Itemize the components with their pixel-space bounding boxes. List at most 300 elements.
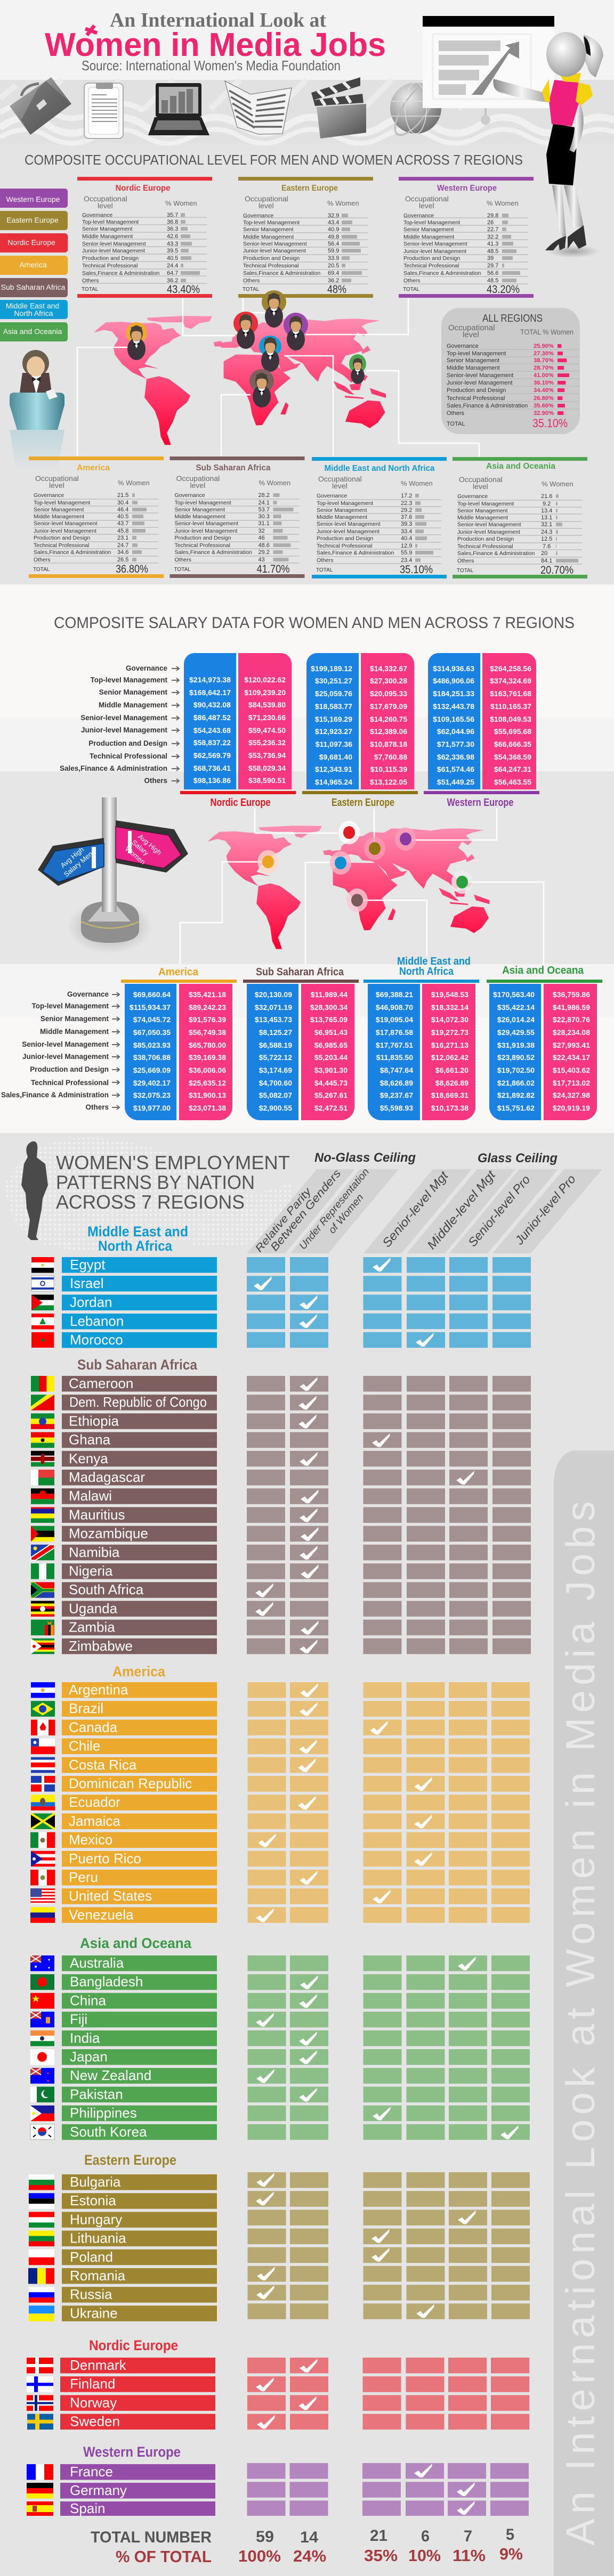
row: Jamaica: Jamaica xyxy=(69,1813,120,1829)
panel: All Regions: Others xyxy=(447,410,465,417)
panel: All Regions: Production and Design xyxy=(447,387,506,394)
totals: total number: 7 xyxy=(464,2528,472,2545)
salary columns: Western Europe: $132,443.78 xyxy=(433,702,474,711)
salary row labels: lower: Production and Design xyxy=(30,1065,109,1073)
salary columns: Eastern Europe: $13,122.05 xyxy=(370,778,407,786)
legend: region tabs: Asia and Oceania xyxy=(3,327,62,336)
panel: Sub Saharan Africa occupational table: 48.6 xyxy=(258,542,270,549)
panel: Asia and Oceania occupational table: 13.4 xyxy=(541,508,552,514)
rows: America xyxy=(30,1682,432,1923)
subtitle: source: Source: International Women's Media Foundation xyxy=(82,58,341,74)
legend: region tabs: North Africa xyxy=(14,309,53,317)
rows: Middle East and North Africa xyxy=(31,1257,434,1348)
row: Chile: Chile xyxy=(69,1738,100,1754)
salary columns: Sub Saharan Africa: $5,082.07 xyxy=(259,1091,292,1099)
salary row labels: lower: Senior Management xyxy=(41,1015,109,1023)
panel: Eastern Europe occupational table: Junior-level Management xyxy=(243,248,306,254)
salary columns: Nordic Europe: $168,642.17 xyxy=(189,688,231,697)
salary row labels: upper: Top-level Management xyxy=(90,676,167,684)
salary row labels: upper: Others xyxy=(144,777,167,785)
column headers: Senior-level Mgt xyxy=(379,1168,451,1250)
panel: Sub Saharan Africa occupational table: 41.70% xyxy=(257,563,290,575)
receptionist figure at podium xyxy=(10,350,64,471)
salary row labels: lower xyxy=(1,990,119,1111)
icon: globe xyxy=(388,75,443,141)
row: Jordan: Jordan xyxy=(70,1294,112,1310)
panel: Nordic Europe occupational table: Senior Management xyxy=(82,226,133,232)
panel: Nordic Europe occupational table: Governance xyxy=(82,212,112,218)
row: New Zealand: New Zealand xyxy=(70,2067,151,2083)
row: Japan: Japan xyxy=(70,2049,108,2065)
salary columns: Sub Saharan Africa: $11,989.44 xyxy=(311,990,348,999)
panel: America occupational table: Top-level Management xyxy=(34,500,90,506)
panel: Western Europe occupational table: 48.5 xyxy=(487,248,498,255)
salary columns: Sub Saharan Africa: $6,985.65 xyxy=(314,1041,348,1049)
salary columns: Asia and Oceana: $21,866.02 xyxy=(497,1079,535,1087)
salary columns: Middle East and North Africa: $14,072.30 xyxy=(431,1015,468,1024)
illustration: salary signpost: Avg High xyxy=(59,845,85,869)
panel: Middle East and North Africa occupational table: Sales,Finance & Administration xyxy=(317,550,394,556)
region heading: Middle East and North Africa xyxy=(87,1224,188,1254)
panel: Asia and Oceania occupational table: Governance xyxy=(457,493,488,500)
cell grid: America xyxy=(266,1682,511,1923)
row: Chile xyxy=(31,1738,317,1754)
salary row labels: upper: Senior Management xyxy=(99,688,167,696)
row: Mauritius xyxy=(31,1506,318,1523)
row: Australia: Australia xyxy=(70,1955,124,1971)
salary columns: Eastern Europe: $17,679.09 xyxy=(370,702,407,711)
panel: America occupational table: 34.6 xyxy=(117,549,128,556)
row: Morocco xyxy=(31,1332,434,1348)
panel: Middle East and North Africa occupational table: 17.2 xyxy=(401,493,412,499)
row: Namibia: Namibia xyxy=(69,1544,120,1560)
panel: Asia and Oceania occupational table: Others xyxy=(457,558,474,564)
column headers: Relative Parity xyxy=(253,1185,314,1254)
salary columns: Middle East and North Africa: $5,598.93 xyxy=(380,1104,413,1112)
salary columns: Western Europe: $264,258.56 xyxy=(490,664,531,673)
row: Bulgaria xyxy=(29,2173,274,2190)
panel: Western Europe occupational table: Production and Design xyxy=(403,255,460,262)
salary columns: Asia and Oceana xyxy=(487,980,602,1120)
panel: Nordic Europe occupational table: Occupational xyxy=(84,194,127,203)
salary columns: Nordic Europe: $53,736.94 xyxy=(248,751,286,760)
row: Peru: Peru xyxy=(69,1869,98,1885)
panel: Nordic Europe occupational table: Middle Management xyxy=(82,233,133,240)
panel: Asia and Oceania occupational table: 12.5 xyxy=(541,536,552,542)
panel: Nordic Europe occupational table: Technical Professional xyxy=(82,263,138,269)
panel: America occupational table: Sales,Finance & Administration xyxy=(34,549,111,556)
side panel: rotated title xyxy=(554,1450,614,2576)
salary columns: Nordic Europe: $84,539.80 xyxy=(248,700,286,709)
illustration: salary signpost: Salary Men xyxy=(62,850,94,878)
panel: Sub Saharan Africa occupational table: Senior Management xyxy=(175,507,225,513)
salary columns: Eastern Europe: $27,300.28 xyxy=(370,676,407,685)
title: Women in Media Jobs: Women in Media Jobs xyxy=(45,27,386,63)
salary columns: Middle East and North Africa: $69,388.21 xyxy=(376,990,413,999)
row: Costa Rica xyxy=(31,1757,316,1773)
panel: Western Europe occupational table: 29.8 xyxy=(487,213,498,219)
row: Mauritius: Mauritius xyxy=(69,1506,125,1522)
row: Sweden: Sweden xyxy=(70,2414,120,2430)
salary columns: Eastern Europe: $14,260.75 xyxy=(370,715,407,723)
row: South Africa: South Africa xyxy=(69,1582,144,1597)
panel: All Regions: 28.70% xyxy=(534,365,554,371)
salary columns: Nordic Europe: $214,973.38 xyxy=(189,675,231,684)
row: Ethiopia: Ethiopia xyxy=(69,1413,119,1429)
panel: America occupational table: Senior Management xyxy=(34,507,84,513)
heading: lower region names: Sub Saharan Africa xyxy=(256,966,344,978)
panel: Asia and Oceania occupational table: Middle Management xyxy=(457,515,508,521)
salary row labels: lower: Others xyxy=(85,1103,109,1111)
panel: Sub Saharan Africa occupational table: 28.2 xyxy=(258,492,270,499)
salary row labels: lower: Technical Professional xyxy=(31,1079,109,1087)
salary row labels: upper: Technical Professional xyxy=(90,752,167,760)
salary columns: Asia and Oceana: $36,759.86 xyxy=(553,990,590,999)
row: Sweden xyxy=(27,2414,275,2430)
salary columns: Western Europe: $66,666.35 xyxy=(494,740,531,748)
row: Russia: Russia xyxy=(70,2286,112,2302)
row: Cameroon xyxy=(31,1375,318,1391)
panel: Eastern Europe occupational table: 36.2 xyxy=(328,278,339,284)
panel: America occupational table: 21.5 xyxy=(117,492,128,499)
salary columns: Eastern Europe: Eastern Europe xyxy=(332,797,394,809)
row: Kenya: Kenya xyxy=(69,1450,108,1466)
row: Argentina xyxy=(31,1682,318,1698)
salary columns: Western Europe: $62,336.98 xyxy=(437,753,474,761)
column headers xyxy=(247,1167,602,1254)
panel: America occupational table: 36.80% xyxy=(116,563,148,575)
panel: Sub Saharan Africa occupational table: 32 xyxy=(258,528,265,534)
panel: Asia and Oceania occupational table: Technical Professional xyxy=(457,543,513,550)
salary columns: America: $29,402.17 xyxy=(133,1079,171,1087)
panel: Nordic Europe occupational table: Nordic Europe xyxy=(115,184,171,193)
panel: Asia and Oceania occupational table: Occupational xyxy=(459,475,503,484)
panel: Asia and Oceania occupational table: Senior Management xyxy=(457,508,508,514)
region heading: Sub Saharan Africa: Sub Saharan Africa xyxy=(77,1357,198,1373)
panel: Sub Saharan Africa occupational table: 24.1 xyxy=(258,500,270,506)
row: Romania xyxy=(28,2267,275,2284)
heading: women's employment patterns xyxy=(56,1152,290,1213)
salary columns: Western Europe: $55,695.68 xyxy=(494,727,531,736)
heading: women's employment patterns: PATTERNS BY NATION xyxy=(56,1171,255,1193)
row: Madagascar: Madagascar xyxy=(69,1469,145,1485)
row: Malawi: Malawi xyxy=(69,1488,112,1504)
panel: Sub Saharan Africa occupational table: level xyxy=(190,481,205,490)
panel: All Regions: 32.90% xyxy=(534,410,554,417)
row: Ethiopia xyxy=(31,1413,317,1429)
salary columns: Eastern Europe: $14,332.67 xyxy=(370,664,407,673)
row: South Africa xyxy=(31,1582,273,1598)
salary row labels: lower: Junior-level Management xyxy=(22,1053,109,1061)
panel: America occupational table: Production and Design xyxy=(34,535,90,541)
salary row labels: lower: Top-level Management xyxy=(31,1002,109,1010)
map pin: Middle East and North Africa xyxy=(259,336,281,372)
panel: Sub Saharan Africa occupational table: 30.3 xyxy=(258,513,270,520)
panel: Nordic Europe occupational table: 39.5 xyxy=(167,248,178,254)
salary columns: Western Europe xyxy=(424,653,539,809)
panel: Sub Saharan Africa occupational table: Junior-level Management xyxy=(175,528,237,534)
heading: lower region names: America xyxy=(158,966,199,978)
panel: Nordic Europe occupational table: Senior-level Management xyxy=(82,241,146,247)
panel: America occupational table: 46.4 xyxy=(117,507,128,513)
row: South Korea: South Korea xyxy=(70,2124,147,2140)
row: Fiji xyxy=(30,2011,274,2027)
row: Lebanon xyxy=(31,1313,317,1330)
panel: Eastern Europe occupational table: 69.4 xyxy=(328,270,339,276)
row: France xyxy=(27,2464,432,2480)
panel: Middle East and North Africa occupational table: % Women xyxy=(401,479,433,487)
panel: Nordic Europe occupational table: level xyxy=(98,201,113,210)
salary columns: Eastern Europe: $12,389.06 xyxy=(370,727,407,736)
panel: Eastern Europe occupational table: Others xyxy=(243,278,260,284)
salary columns: America: $23,071.38 xyxy=(189,1104,226,1112)
map marker: America xyxy=(257,850,279,874)
totals: total number: 6 xyxy=(421,2528,430,2545)
row: Dominican Republic: Dominican Republic xyxy=(69,1775,192,1791)
panel: Sub Saharan Africa occupational table: 31.1 xyxy=(258,520,270,527)
panel: Middle East and North Africa occupational table: 29.2 xyxy=(401,507,412,513)
panel: Eastern Europe occupational table: Senior Management xyxy=(243,226,294,233)
panel: Eastern Europe occupational table: 43.4 xyxy=(328,219,339,226)
panel: Eastern Europe occupational table: 40.9 xyxy=(328,226,339,233)
region heading: Middle East and North Africa: North Africa xyxy=(98,1238,173,1254)
panel: Middle East and North Africa occupational table: 39.3 xyxy=(401,521,412,527)
row: Lithuania xyxy=(29,2229,390,2246)
salary columns: Nordic Europe: $120,022.62 xyxy=(244,675,286,684)
row: Zimbabwe xyxy=(31,1638,318,1654)
panel: Eastern Europe occupational table: level xyxy=(258,201,274,210)
rows: Sub Saharan Africa xyxy=(31,1375,474,1654)
panel: Middle East and North Africa occupational table: 23.4 xyxy=(401,557,412,564)
salary columns: Nordic Europe: $109,239.20 xyxy=(244,688,286,697)
row: Lithuania: Lithuania xyxy=(70,2230,126,2246)
salary columns: Sub Saharan Africa: $13,765.09 xyxy=(310,1015,348,1024)
salary columns: Middle East and North Africa: $12,062.42 xyxy=(431,1053,468,1062)
panel: Eastern Europe occupational table: Top-level Management xyxy=(243,219,300,226)
side panel: rotated title: An International Look at Women in Media Jobs xyxy=(558,1501,603,2546)
panel: Nordic Europe occupational table: TOTAL xyxy=(82,287,99,292)
panel: Middle East and North Africa occupational table: Senior-level Management xyxy=(317,521,381,527)
panel: All Regions: 27.30% xyxy=(534,350,554,357)
map: salary world map xyxy=(207,826,489,949)
salary columns: Nordic Europe: $90,432.08 xyxy=(193,700,231,709)
panel: America occupational table: Senior-level Management xyxy=(34,520,98,527)
panel: Middle East and North Africa occupational table: 22.3 xyxy=(401,500,412,507)
panel: All Regions: Senior-level Management xyxy=(447,372,513,379)
salary columns: Western Europe: $109,165.56 xyxy=(433,715,474,723)
salary columns: Asia and Oceana: $27,993.41 xyxy=(553,1041,590,1049)
salary columns: Asia and Oceana: $28,234.08 xyxy=(553,1028,590,1037)
row: Costa Rica: Costa Rica xyxy=(69,1757,137,1773)
row: Mexico: Mexico xyxy=(69,1832,112,1848)
illustration: salary signpost xyxy=(38,797,188,953)
salary columns: Eastern Europe: $199,189.12 xyxy=(311,664,352,673)
cell grid: Asia and Oceana xyxy=(266,1955,511,2140)
connector lines: occupational map xyxy=(77,298,479,457)
panel: Nordic Europe occupational table: % Women xyxy=(165,199,197,207)
salary columns: Eastern Europe: $20,095.33 xyxy=(370,689,407,698)
row: Canada: Canada xyxy=(69,1719,118,1735)
row: Poland xyxy=(29,2248,390,2265)
panel: All Regions: ALL REGIONS xyxy=(482,313,543,324)
column headers: of Women xyxy=(327,1192,366,1236)
row: Madagascar xyxy=(31,1469,474,1485)
salary row labels: lower: Governance xyxy=(67,990,109,998)
panel: Sub Saharan Africa occupational table: Sub Saharan Africa xyxy=(196,463,271,472)
row: Venezuela xyxy=(30,1906,274,1923)
salary columns: Eastern Europe: $15,169.29 xyxy=(315,715,352,723)
salary columns: Asia and Oceana: $17,713.02 xyxy=(553,1079,590,1087)
salary columns: Western Europe: $61,574.46 xyxy=(437,765,474,773)
panel: Eastern Europe occupational table: Senior-level Management xyxy=(243,241,307,247)
panel: Western Europe occupational table: 56.6 xyxy=(487,270,498,276)
panel: America occupational table: Others xyxy=(34,557,51,563)
salary columns: Nordic Europe: $71,230.66 xyxy=(248,713,286,722)
panel: Asia and Oceania occupational table: level xyxy=(473,482,488,491)
salary columns: Middle East and North Africa: $17,876.58 xyxy=(376,1028,413,1037)
salary columns: Western Europe: $51,449.25 xyxy=(437,778,474,786)
panel: All Regions xyxy=(441,308,580,434)
salary columns: Sub Saharan Africa: $8,125.27 xyxy=(259,1028,292,1037)
icon: clipboard xyxy=(84,83,123,138)
panel: Western Europe occupational table: 22.7 xyxy=(487,226,498,233)
panel: Eastern Europe occupational table: 33.9 xyxy=(328,255,339,262)
legend: region tabs: Eastern Europe xyxy=(6,216,59,224)
panel: Sub Saharan Africa occupational table: Senior-level Management xyxy=(175,520,238,527)
panel: America occupational table: 43.7 xyxy=(117,520,128,527)
salary columns: Asia and Oceana: $31,919.38 xyxy=(497,1041,535,1049)
column headers: Between Genders xyxy=(268,1167,344,1253)
row: Brazil xyxy=(31,1700,318,1717)
panel: Asia and Oceania occupational table: 32.1 xyxy=(541,521,552,528)
panel: Nordic Europe occupational table: Sales,Finance & Administration xyxy=(82,270,159,276)
salary columns: Eastern Europe: $7,760.88 xyxy=(374,753,407,761)
figure: presenter woman xyxy=(493,32,603,258)
row: Venezuela: Venezuela xyxy=(69,1906,134,1922)
row: Israel xyxy=(31,1275,272,1291)
panel: Nordic Europe occupational table xyxy=(77,177,212,298)
map pin: Sub Saharan Africa xyxy=(249,369,274,407)
salary columns: Asia and Oceana: $19,702.50 xyxy=(497,1066,535,1074)
row: Ecuador xyxy=(31,1794,316,1811)
salary columns: Middle East and North Africa: $9,237.67 xyxy=(380,1091,413,1099)
salary columns: Asia and Oceana: $29,429.55 xyxy=(497,1028,535,1037)
salary columns: Western Europe: $163,761.68 xyxy=(490,689,531,698)
row: Bangladesh: Bangladesh xyxy=(70,1974,143,1990)
row: India: India xyxy=(70,2030,100,2046)
salary columns: Middle East and North Africa: $16,271.13 xyxy=(431,1041,468,1049)
row: Australia xyxy=(30,1955,476,1971)
salary columns: Asia and Oceana: $24,327.98 xyxy=(553,1091,590,1099)
salary columns: Sub Saharan Africa xyxy=(243,980,359,1120)
salary columns: Western Europe: Western Europe xyxy=(447,797,514,809)
salary columns: Western Europe: $54,368.59 xyxy=(494,753,531,761)
panel: Sub Saharan Africa occupational table: Sales,Finance & Administration xyxy=(175,549,252,556)
panel: Nordic Europe occupational table: 43.3 xyxy=(167,241,178,247)
group heading: Glass Ceiling: Glass Ceiling xyxy=(478,1151,558,1165)
panel: Asia and Oceania occupational table: 24.3 xyxy=(541,529,552,535)
salary columns: Sub Saharan Africa: $32,071.19 xyxy=(255,1003,292,1012)
salary columns: America: $91,576.39 xyxy=(189,1015,226,1024)
salary columns: Sub Saharan Africa: $3,901.30 xyxy=(314,1066,348,1074)
row: Hungary: Hungary xyxy=(70,2211,122,2227)
row: Fiji: Fiji xyxy=(70,2011,87,2027)
row: Mozambique xyxy=(31,1526,319,1542)
panel: Western Europe occupational table: Middle Management xyxy=(403,234,454,240)
panel: Nordic Europe occupational table: 36.3 xyxy=(167,226,178,232)
row: Pakistan xyxy=(30,2086,317,2102)
salary columns: Asia and Oceana: $26,014.24 xyxy=(497,1015,535,1024)
row: South Korea xyxy=(30,2124,519,2140)
row: Zimbabwe: Zimbabwe xyxy=(69,1638,133,1654)
salary columns: America: $39,169.38 xyxy=(189,1053,226,1062)
panel: Middle East and North Africa occupational table: TOTAL xyxy=(316,567,333,573)
panel: Western Europe occupational table: Occupational xyxy=(405,194,449,203)
map pin: America xyxy=(126,322,147,360)
salary columns: Nordic Europe: $98,136.86 xyxy=(193,776,231,785)
decorative dot field xyxy=(6,1138,294,1251)
salary columns: Western Europe: $374,324.69 xyxy=(490,676,531,685)
legend: region tabs: Middle East and xyxy=(6,301,59,310)
panel: Western Europe occupational table: Western Europe xyxy=(437,184,497,193)
panel: Nordic Europe occupational table: 42.6 xyxy=(167,233,178,240)
heading: lower region names xyxy=(158,956,584,978)
row: Puerto Rico: Puerto Rico xyxy=(69,1851,141,1866)
map marker: Nordic Europe xyxy=(338,821,360,844)
icon: briefcase xyxy=(10,77,71,135)
panel: Sub Saharan Africa occupational table: 46 xyxy=(258,535,265,541)
panel: All Regions: TOTAL xyxy=(447,421,465,427)
illustration: salary signpost: Women xyxy=(124,845,147,866)
panel: Asia and Oceania occupational table: Junior-level Management xyxy=(457,529,520,535)
row: China: China xyxy=(70,1992,106,2008)
panel: All Regions: Middle Management xyxy=(447,365,500,371)
panel: Sub Saharan Africa occupational table: % Women xyxy=(259,479,290,487)
row: Kenya xyxy=(31,1450,318,1466)
salary columns: Nordic Europe xyxy=(180,653,296,809)
salary columns: Middle East and North Africa: $18,332.14 xyxy=(431,1003,468,1012)
icon: newspaper xyxy=(225,81,292,134)
panel: Asia and Oceania occupational table: 7.6 xyxy=(543,543,551,550)
row: Poland: Poland xyxy=(70,2249,113,2265)
row: Spain xyxy=(27,2500,475,2516)
salary columns: Eastern Europe: $11,097.36 xyxy=(316,740,352,748)
panel: Western Europe occupational table: Others xyxy=(403,278,421,284)
row: China xyxy=(30,1992,317,2009)
panel: Asia and Oceania occupational table: Asia and Oceania xyxy=(486,462,555,471)
row: Ecuador: Ecuador xyxy=(69,1794,120,1810)
row: Denmark: Denmark xyxy=(70,2357,126,2373)
salary columns: Western Europe: $71,577.30 xyxy=(437,740,474,748)
panel: Asia and Oceania occupational table: 21.6 xyxy=(541,493,552,500)
salary columns: Middle East and North Africa: $17,767.51 xyxy=(376,1041,413,1049)
row: Mexico xyxy=(30,1832,276,1848)
salary columns: Sub Saharan Africa: $5,722.12 xyxy=(259,1053,292,1062)
panel: All Regions: 41.00% xyxy=(534,372,554,379)
panel: Middle East and North Africa occupational table: 40.4 xyxy=(401,535,412,542)
panel: Western Europe occupational table: Senior-level Management xyxy=(403,241,467,247)
connector lines: salary map xyxy=(180,808,544,967)
legend: region tabs: Western Europe xyxy=(6,195,60,203)
salary columns: Nordic Europe: Nordic Europe xyxy=(210,797,271,809)
salary row labels: upper xyxy=(60,664,179,785)
map pin: Western Europe xyxy=(284,313,308,350)
panel: All Regions: Sales,Finance & Administration xyxy=(447,403,528,409)
salary columns: America: $74,045.72 xyxy=(133,1015,171,1024)
row: France: France xyxy=(70,2464,113,2480)
salary columns: America: $89,242.23 xyxy=(189,1003,226,1012)
salary columns: Eastern Europe: $14,965.24 xyxy=(315,778,352,786)
